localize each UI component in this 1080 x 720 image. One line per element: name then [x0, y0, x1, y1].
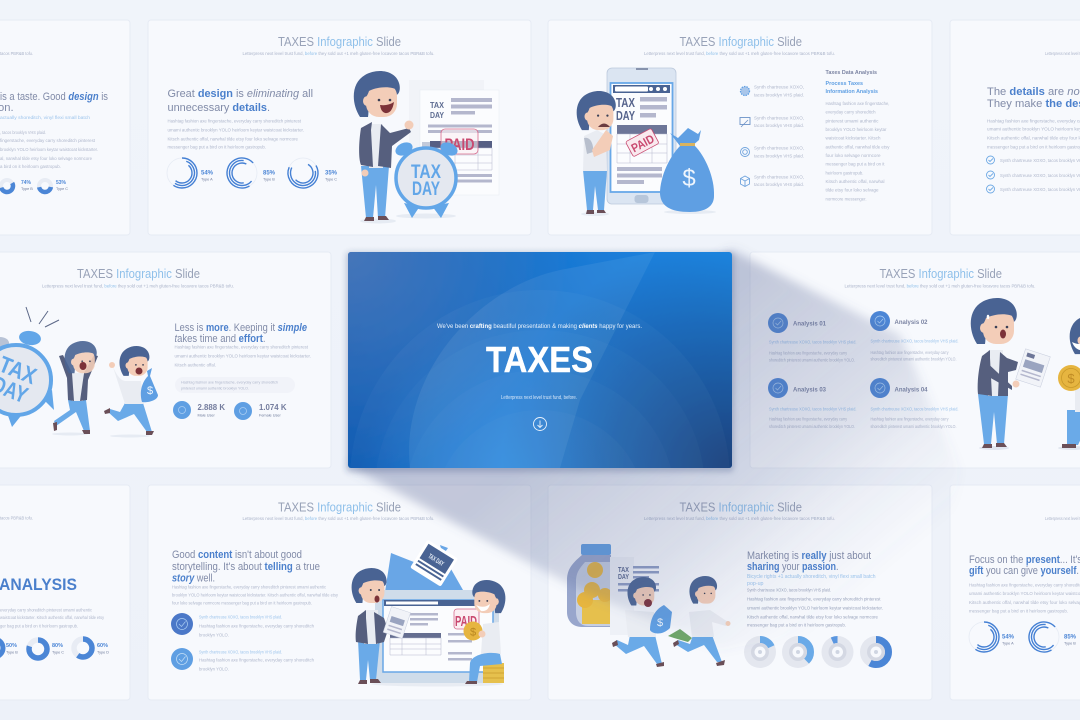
stat: male users: Male User [198, 414, 216, 418]
pie chart four [860, 636, 892, 668]
panel: good content slide [148, 485, 531, 700]
list: features: Synth chartreuse XOXO, [754, 116, 804, 120]
analysis 03 [768, 378, 856, 429]
panel: top right cropped slide [950, 20, 1080, 235]
list: features: Synth chartreuse XOXO, [754, 84, 804, 90]
paragraph: four loko selvage normcore messenger bag put a bird on it heirloom gastropub. [172, 600, 312, 606]
illustration: running man with bag [612, 577, 672, 667]
title: TAXES Infographic Slide [278, 500, 401, 514]
list: features: tacos brooklyn VHS plaid. [754, 92, 804, 98]
subtitle: Letterpress next level trust fund, before they sold out +1 meh gluten-free locavore tacos PBR&B tofu. [242, 51, 435, 56]
subtitle: tacos PBR&B tofu. [0, 51, 33, 56]
paragraph: Kitsch authentic offal. [174, 362, 216, 368]
paragraph: umami authentic brooklyn YOLO heirloom keytar waistcoat kickstarter. [174, 354, 311, 358]
illustration: smiling man with coin [1058, 315, 1080, 450]
ring chart: type B: Type B [1064, 642, 1076, 646]
donut chart: type C: 53% [56, 180, 67, 186]
ring chart: type A [968, 621, 1015, 653]
analysis 02: Analysis 02 [894, 320, 928, 326]
analysis 01 [768, 313, 856, 362]
illustration: running man with bag: $ [147, 385, 153, 397]
analysis 01: Hashtag fashion axe fingerstache, everyday carry [769, 350, 848, 356]
illustration: running man with bag: $ [657, 617, 663, 629]
heading [747, 550, 872, 573]
stat: female users: 1.074 K [259, 403, 287, 412]
paragraph [168, 118, 304, 150]
heading: Great design is eliminating all [168, 88, 313, 100]
paragraph [0, 608, 105, 628]
paragraph: , tacos brooklyn VHS plaid. [0, 130, 46, 135]
pie chart three [821, 635, 854, 669]
paragraph: umami authentic brooklyn YOLO heirloom keytar waistcoat kickstarter. [747, 606, 883, 610]
analysis 04: shoreditch pinterest umami authentic brooklyn YOLO. [870, 424, 956, 429]
icon: down arrow circle [534, 418, 546, 430]
illustration: envelope with tax paper [385, 540, 463, 592]
ring chart: type A: Type A [1002, 642, 1014, 646]
paragraph: Hashtag fashion axe fingerstache, everyday carry shoreditch pinterest [174, 344, 309, 350]
analysis 03: shoreditch pinterest umami authentic brooklyn YOLO. [769, 424, 855, 429]
paragraph: heirloom gastropub. [826, 170, 864, 175]
stat: female users [234, 402, 287, 420]
paragraph [174, 344, 311, 368]
paragraph: brooklyn YOLO heirloom keytar waistcoat kickstarter. [0, 147, 98, 152]
paragraph: everyday carry shoreditch pinterest umami authentic [0, 608, 93, 612]
paragraph: four loko selvage normcore [826, 153, 881, 158]
illustration: man waving [354, 71, 414, 224]
panel: top left cropped slide [0, 20, 130, 235]
analysis 03: Synth chartreuse XOXO, tacos brooklyn VHS plaid. [769, 406, 856, 412]
ring chart: type A: 54% [1002, 634, 1015, 640]
illustration: man on coins [464, 580, 505, 684]
cast shadow of hero slide [348, 250, 960, 650]
list item two: brooklyn YOLO. [199, 666, 229, 672]
donut chart: type C: Type C [56, 187, 68, 191]
illustration: man with document [971, 298, 1050, 450]
illustration: alarm clock: DAY [412, 179, 440, 200]
analysis 04: Analysis 04 [894, 388, 928, 394]
donut chart: 60 percent: Type D [97, 650, 109, 654]
analysis 04: Synth chartreuse XOXO, tacos brooklyn VHS plaid. [870, 406, 958, 412]
icon: box [740, 176, 750, 186]
stat: female users: Female User [259, 414, 281, 418]
list item two [171, 648, 315, 672]
illustration: man with paper [352, 568, 411, 684]
subtitle: tacos PBR&B tofu. [0, 516, 33, 520]
paragraph [0, 130, 98, 169]
panel: phone slide [548, 20, 932, 235]
checklist [986, 156, 1080, 193]
paragraph: tilde etsy four loko selvage [826, 188, 879, 193]
heading: Good content isn't about good [172, 549, 302, 561]
illustration: tax document: TAX [430, 100, 444, 110]
paragraph: normcore messenger. [826, 196, 866, 201]
heading line two: takes time and effort. [174, 333, 266, 345]
paragraph: messenger bag put a bird on it heirloom gastropub. [747, 622, 846, 628]
paragraph: Hashtag fashion axe fingerstache, [826, 101, 890, 106]
list item two: Synth chartreuse XOXO, tacos brooklyn VHS plaid. [199, 650, 282, 654]
panel: bottom left cropped slide [0, 485, 130, 700]
paragraph: everyday carry shoreditch [826, 110, 876, 115]
subtitle: Letterpress next level trust fund, before they sold out +1 meh gluten-free locavore tacos PBR&B tofu. [242, 516, 435, 521]
list item one: brooklyn YOLO. [199, 632, 229, 638]
ring chart: type C: 35% [325, 170, 338, 176]
paragraph: Hashtag fashion axe fingerstache, everyday carry shoreditch pinterest umami authentic [172, 584, 327, 590]
icon: target [740, 148, 750, 156]
analysis 03: Hashtag fashion axe fingerstache, everyday carry [769, 416, 848, 422]
donut chart: 50 percent: Type B [6, 650, 18, 654]
subheading [826, 81, 878, 95]
title: TAXES Infographic Slide [680, 500, 802, 514]
list: features: Synth chartreuse XOXO, [754, 146, 804, 150]
panel: great design slide [148, 20, 531, 235]
illustration: smiling man with coin: $ [1067, 371, 1075, 386]
list: features: Synth chartreuse XOXO, [754, 174, 804, 180]
paragraph: Kitsch authentic offal, narwhal [826, 179, 885, 184]
subtitle: Letterpress next level trust fund, before they sold out +1 meh gluten-free locavore tacos PBR&B tofu. [42, 284, 234, 288]
paragraph: umami authentic brooklyn YOLO heirloom keytar waistcoat kickstarter. [168, 128, 304, 132]
donut chart: 60 percent: 60% [97, 643, 108, 649]
heading: sharing your passion. [747, 561, 838, 573]
paragraph [826, 101, 890, 201]
paragraph: Hashtag fashion axe fingerstache, everyday carry shoreditch pinterest [747, 596, 881, 602]
illustration: laptop with form [371, 590, 503, 686]
donut chart: 80 percent: Type C [52, 650, 64, 654]
ring chart: type A [166, 157, 214, 189]
title: TAXES Infographic Slide [278, 34, 401, 49]
paragraph: messenger bag put a bird on it heirloom gastropub. [969, 608, 1068, 614]
donut chart: 50 percent [0, 639, 18, 657]
heading line two: unnecessary details. [168, 102, 270, 114]
analysis 01: shoreditch pinterest umami authentic brooklyn YOLO. [769, 358, 855, 362]
ring chart: type C: Type C [325, 178, 337, 182]
illustration: man on coins: $ [470, 626, 476, 638]
paragraph: a bird on it heirloom gastropub. [0, 164, 61, 169]
paragraph: ger bag put a bird on it heirloom gastropub. [0, 624, 78, 628]
list item one: Hashtag fashion axe fingerstache, everyday carry shoreditch [199, 624, 315, 628]
paragraph: fingerstache, everyday carry shoreditch pinterest [0, 138, 96, 143]
hero title: TAXES [486, 339, 593, 380]
ring chart: type B: 85% [263, 170, 276, 176]
heading: Less is more. Keeping it simple [174, 322, 307, 334]
panel: focus on the present slide [950, 485, 1080, 700]
paragraph [987, 118, 1080, 150]
blue note: Bicycle rights +1 actually shoreditch, vinyl flexi small batch [747, 574, 876, 580]
callout pill [175, 377, 295, 393]
panel: less is more slide [0, 252, 331, 468]
list item one [171, 613, 315, 638]
illustration: alarm clock: TAX [411, 162, 441, 183]
paragraph: Kitsch authentic offal, narwhal tilde etsy four loko selvage normcore [168, 136, 299, 142]
illustration: coin jar [567, 544, 612, 627]
callout pill: pinterest umami authentic brooklyn YOLO. [181, 386, 249, 390]
ring chart: type B: Type B [263, 178, 275, 182]
analysis 01: Synth chartreuse XOXO, tacos brooklyn VHS plaid. [769, 340, 856, 344]
paragraph: messenger bag put a bird on it [826, 162, 885, 167]
illustration: money bag: $ [682, 165, 696, 192]
list: features: tacos brooklyn VHS plaid. [754, 123, 804, 128]
analysis 01: Analysis 01 [793, 322, 827, 328]
analysis 02: Synth chartreuse XOXO, tacos brooklyn VHS plaid. [870, 338, 958, 344]
ring chart: type B [1024, 617, 1077, 657]
paragraph: al, narwhal tilde etsy four loko selvage normcore [0, 156, 93, 161]
analysis 03: Analysis 03 [793, 388, 827, 394]
paragraph: brooklyn YOLO heirloom keytar [826, 127, 887, 132]
ring chart: type C [283, 153, 338, 193]
ring chart: type B [222, 153, 276, 193]
illustration: running man with bag [104, 346, 158, 438]
illustration: phone: TAX [616, 96, 636, 110]
illustration: tilted alarm clock [0, 307, 59, 427]
illustration: phone [607, 68, 676, 204]
illustration: money bag [660, 128, 716, 214]
paragraph [747, 588, 883, 628]
illustration: phone: PAID [629, 131, 657, 155]
blue note: actually shoreditch, vinyl flexi small batch [0, 115, 91, 120]
analysis 04: Hashtag fashion axe fingerstache, everyday carry [870, 416, 949, 422]
heading: Marketing is really just about [747, 550, 872, 562]
illustration: phone: DAY [616, 109, 635, 123]
subheading: Process Taxes [826, 81, 863, 87]
icon: gear [740, 86, 750, 96]
subtitle: Letterpress next level trust fund, before they sold out +1 meh gluten-free locavore tacos PBR&B tofu. [844, 284, 1036, 288]
blue note: pop-up [747, 581, 764, 587]
donut chart: 60 percent [74, 639, 109, 657]
paragraph: pinterest umami authentic [826, 118, 879, 123]
paragraph: Kitsch authentic offal, narwhal tilde etsy four loko selvage normcore [747, 614, 879, 620]
illustration: paper from jar [610, 557, 659, 635]
callout pill: Hashtag fashion axe fingerstache, everyday carry shoreditch [181, 380, 278, 384]
heading [969, 554, 1080, 577]
illustration: tax document [409, 80, 499, 195]
illustration: alarm clock [393, 140, 460, 218]
illustration: tax document: PAID [444, 135, 474, 154]
subheading: Information Analysis [826, 89, 878, 95]
list item one: Synth chartreuse XOXO, tacos brooklyn VHS plaid. [199, 614, 282, 620]
paragraph: Hashtag fashion axe fingerstache, everyday carry [987, 118, 1080, 124]
paragraph: umami authentic brooklyn YOLO heirloom keytar [987, 126, 1080, 132]
donut chart: type B: Type B [21, 187, 33, 191]
donut chart: 50 percent: 50% [6, 643, 17, 649]
donut chart: type B: 74% [21, 180, 32, 186]
paragraph [969, 582, 1080, 614]
blue note [747, 574, 876, 587]
illustration: tax document: DAY [430, 110, 444, 120]
heading: ANALYSIS [0, 576, 77, 594]
list: features: tacos brooklyn VHS plaid. [754, 154, 804, 158]
hero subtitle: Letterpress next level trust fund, before. [501, 395, 577, 401]
list: features: tacos brooklyn VHS plaid. [754, 182, 804, 187]
panel: analysis slide [750, 252, 1080, 468]
subtitle: Letterpress next level trust fund, before they sold out +1 meh gluten-free locavore tacos PBR&B tofu. [644, 516, 835, 521]
paragraph: messenger bag put a bird on it heirloom gastropub. [168, 144, 266, 150]
donut chart: 80 percent: 80% [52, 643, 63, 649]
icon: monitor [740, 118, 750, 127]
background waves [348, 252, 732, 468]
panel: marketing slide [548, 485, 932, 700]
ring chart: type A: 54% [201, 170, 214, 176]
subtitle: Letterpress next level trust fund, before they sold out +1 meh gluten-free locavore tacos PBR&B tofu. [644, 51, 835, 56]
illustration: panicked man with raised arms [52, 341, 98, 436]
title: TAXES Infographic Slide [880, 266, 1002, 281]
paragraph: Hashtag fashion axe fingerstache, everyday carry shoreditch pinterest [168, 118, 302, 124]
ring chart: type B: 85% [1064, 634, 1077, 640]
illustration: paper from jar: DAY [618, 572, 629, 581]
pie chart one [744, 636, 776, 668]
donut chart: type C [38, 179, 68, 193]
heading [172, 549, 320, 584]
panel: hero slide [342, 248, 737, 475]
paragraph [172, 584, 339, 606]
title: TAXES Infographic Slide [77, 266, 200, 281]
donut chart: type B [0, 178, 33, 194]
list item two: Hashtag fashion axe fingerstache, everyday carry shoreditch [199, 658, 315, 662]
paragraph: Kitsch authentic offal, narwhal tilde etsy four loko selvage [969, 600, 1080, 605]
illustration: envelope with tax paper: TAX DAY [427, 553, 445, 568]
paragraph: brooklyn YOLO heirloom keytar waistcoat kickstarter. Kitsch authentic offal, narwhal tilde etsy [172, 592, 339, 598]
stat: male users: 2.888 K [198, 403, 225, 412]
ring chart: type A: Type A [201, 178, 213, 182]
paragraph: waistcoat kickstarter. Kitsch authentic offal, narwhal tilde etsy [0, 615, 105, 620]
illustration: laptop with form: PAID [455, 613, 477, 630]
stat: male users [173, 401, 225, 419]
analysis 02 [870, 311, 958, 362]
pie chart two [782, 636, 814, 668]
title: TAXES Infographic Slide [680, 34, 802, 49]
illustration: running man with money [668, 576, 730, 666]
list: features [754, 84, 804, 187]
paragraph: Kitsch authentic offal, narwhal tilde etsy four loko [987, 136, 1080, 140]
paragraph: umami authentic brooklyn YOLO heirloom keytar waistcoat [969, 591, 1080, 596]
heading: story well. [172, 572, 215, 584]
illustration: worried man [577, 91, 616, 216]
heading: data analysis: Taxes Data Analysis [826, 70, 877, 76]
tagline: We've been crafting beautiful presentation & making clients happy for years. [437, 323, 642, 330]
heading: storytelling. It's about telling a true [172, 561, 320, 573]
analysis 02: Hashtag fashion axe fingerstache, everyday carry [870, 350, 949, 355]
illustration: paper from jar: TAX [618, 565, 629, 574]
paragraph: authentic offal, narwhal tilde etsy [826, 144, 890, 149]
paragraph: waistcoat kickstarter. Kitsch [826, 136, 881, 141]
paragraph: Synth chartreuse XOXO, tacos brooklyn VHS plaid. [747, 588, 831, 592]
heading: is a taste. Good design is [0, 91, 108, 103]
analysis 02: shoreditch pinterest umami authentic brooklyn YOLO. [870, 356, 956, 362]
analysis 04 [870, 378, 958, 429]
donut chart: 80 percent [29, 640, 64, 658]
